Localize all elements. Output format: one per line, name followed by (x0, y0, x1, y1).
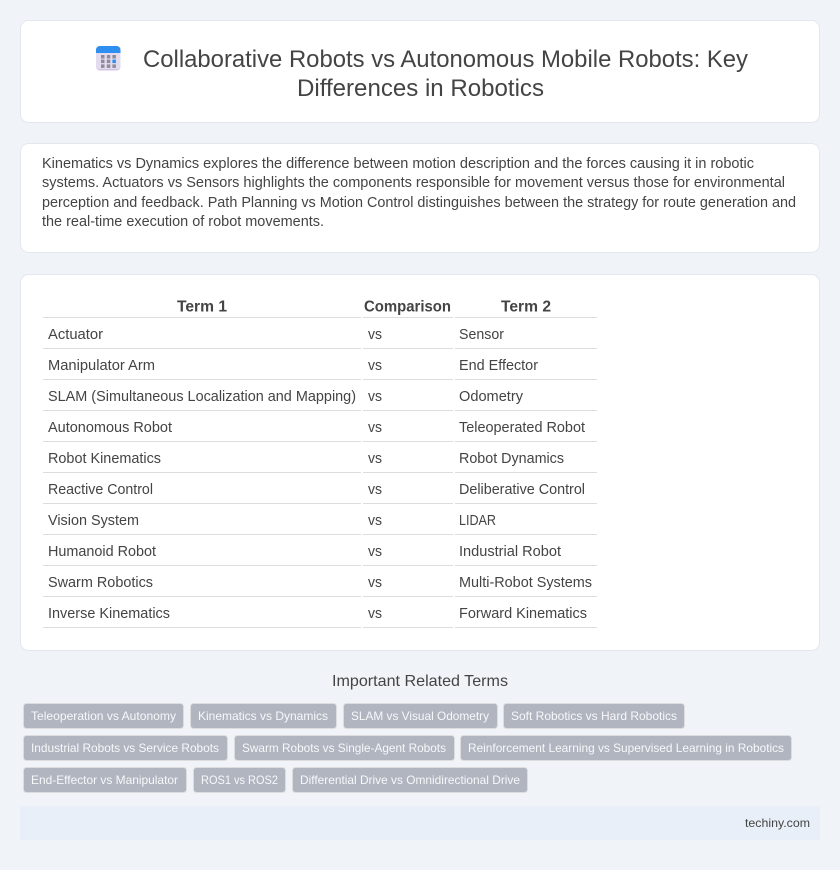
table header: Comparison (364, 298, 451, 316)
table row: Manipulator Arm: Manipulator Arm (48, 358, 155, 374)
tag (292, 768, 528, 792)
table row: Actuator: Sensor (459, 327, 504, 343)
tags: related terms (24, 704, 792, 792)
heading: related terms: Important Related Terms (332, 673, 508, 690)
table row: Swarm Robotics: Swarm Robotics (48, 575, 153, 591)
tag: End-Effector vs Manipulator (31, 773, 178, 787)
panel: header (20, 20, 820, 122)
table row: Swarm Robotics: Multi-Robot Systems (459, 575, 592, 591)
table row: Robot Kinematics: vs (368, 451, 382, 467)
table row: Robot Kinematics: Robot Dynamics (459, 451, 564, 467)
table row: SLAM: SLAM (Simultaneous Localization and Mapping) (48, 389, 356, 405)
table row: Actuator (48, 327, 504, 343)
tag (194, 768, 286, 792)
tag (24, 768, 186, 792)
table row: Vision System: Vision System (48, 513, 139, 529)
table row: SLAM (48, 389, 524, 405)
table row: SLAM: Odometry (459, 389, 524, 405)
panel: introduction (20, 144, 820, 252)
tag: Swarm Robots vs Single-Agent Robots (242, 741, 446, 755)
table row: Robot Kinematics (48, 451, 564, 467)
tag: Industrial Robots vs Service Robots (31, 741, 219, 755)
text block: introduction (42, 156, 796, 230)
title (143, 46, 748, 102)
table header: Term 1 (177, 298, 227, 316)
tag (504, 704, 684, 728)
footer: techiny.com (745, 816, 810, 830)
tag (460, 736, 792, 760)
table row: Actuator: vs (368, 327, 382, 343)
table row: Vision System (48, 513, 496, 529)
table row: Humanoid Robot: vs (368, 544, 382, 560)
icon: calendar (96, 46, 120, 70)
tag: SLAM vs Visual Odometry (351, 709, 489, 723)
panel: comparison table (20, 274, 820, 650)
tag: Soft Robotics vs Hard Robotics (511, 709, 677, 723)
table row: Autonomous Robot: Teleoperated Robot (459, 420, 585, 436)
table row: Reactive Control: Deliberative Control (459, 482, 585, 498)
table row: Inverse Kinematics: Inverse Kinematics (48, 606, 170, 622)
table row: Vision System: LIDAR (459, 513, 496, 529)
table row: Autonomous Robot: vs (368, 420, 382, 436)
tag (190, 704, 336, 728)
title: Differences in Robotics (297, 75, 544, 102)
table row: Vision System: vs (368, 513, 382, 529)
tag (24, 704, 184, 728)
table row: Actuator: Actuator (48, 327, 103, 343)
table row: Reactive Control: Reactive Control (48, 482, 153, 498)
table row: Inverse Kinematics: Forward Kinematics (459, 606, 587, 622)
table header: Term 2 (501, 298, 551, 316)
tag (234, 736, 454, 760)
table row: Humanoid Robot: Humanoid Robot (48, 544, 156, 560)
text block: introduction: systems. Actuators vs Sensors highlights the components responsible for movement versus those for environmental (42, 175, 785, 191)
tag (344, 704, 498, 728)
table row: Autonomous Robot: Autonomous Robot (48, 420, 172, 436)
tag (24, 736, 228, 760)
table row: Reactive Control: vs (368, 482, 382, 498)
table row: Manipulator Arm: vs (368, 358, 382, 374)
text block: introduction: the real-time execution of robot movements. (42, 214, 324, 230)
table row: SLAM: vs (368, 389, 382, 405)
tag: Kinematics vs Dynamics (198, 709, 328, 723)
table row: Swarm Robotics: vs (368, 575, 382, 591)
tag: Teleoperation vs Autonomy (31, 709, 176, 723)
text block: introduction: perception and feedback. Path Planning vs Motion Control distinguishes between the strategy for route generation and (42, 195, 796, 211)
title: Collaborative Robots vs Autonomous Mobile Robots: Key (143, 46, 748, 73)
table row: Robot Kinematics: Robot Kinematics (48, 451, 161, 467)
table row: Manipulator Arm: End Effector (459, 358, 538, 374)
tag: Reinforcement Learning vs Supervised Learning in Robotics (468, 741, 784, 755)
table row: Humanoid Robot: Industrial Robot (459, 544, 561, 560)
tag: Differential Drive vs Omnidirectional Drive (300, 773, 520, 787)
table row: Swarm Robotics (48, 575, 592, 591)
text block: introduction: Kinematics vs Dynamics explores the difference between motion description and the forces causing it in robotic (42, 156, 754, 172)
table row: Reactive Control (48, 482, 585, 498)
table row: Autonomous Robot (48, 420, 585, 436)
table header (177, 298, 551, 316)
table row: Humanoid Robot (48, 544, 561, 560)
tag: ROS1 vs ROS2 (201, 773, 278, 787)
table row: Manipulator Arm (48, 358, 538, 374)
footer (20, 806, 820, 840)
table row: Inverse Kinematics (48, 606, 587, 622)
table row: Inverse Kinematics: vs (368, 606, 382, 622)
